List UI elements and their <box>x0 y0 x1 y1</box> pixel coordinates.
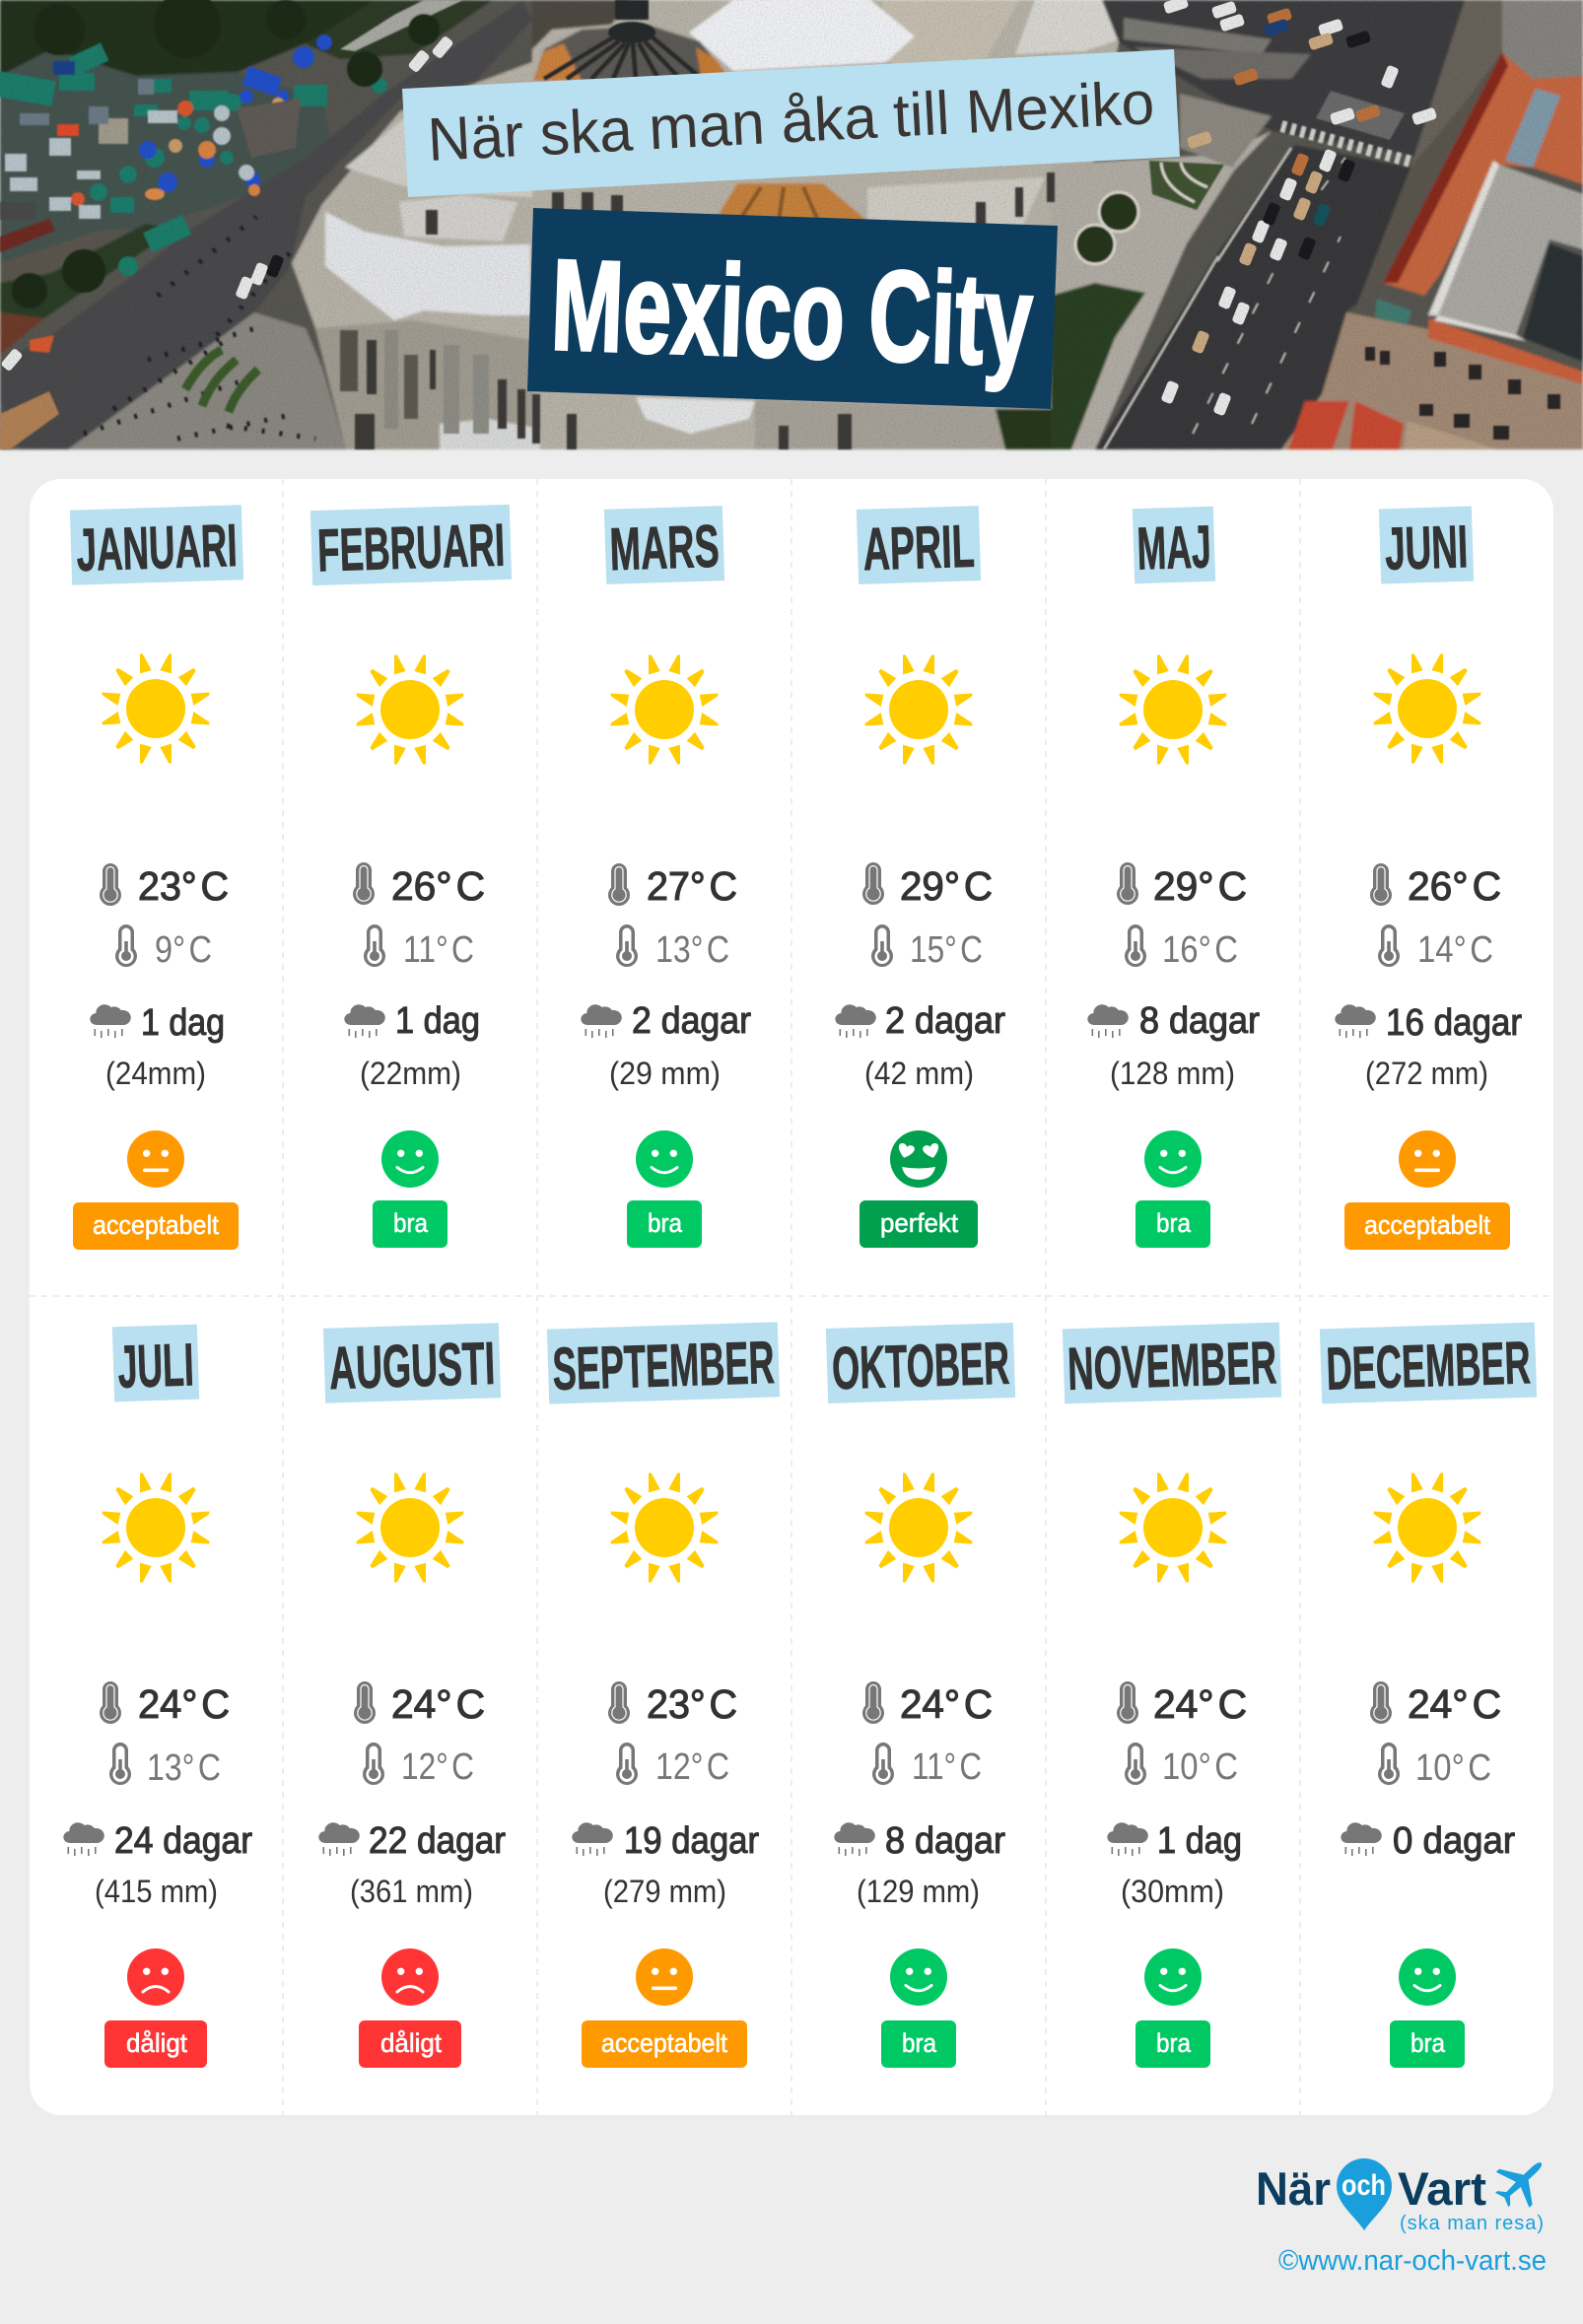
icon: sun <box>357 1472 463 1583</box>
icon: neutral face <box>127 1130 184 1188</box>
month heading: NOVEMBER <box>1067 1329 1277 1402</box>
banner: subtitle <box>402 49 1180 197</box>
high temperature: 29°C <box>1153 863 1247 909</box>
month heading: APRIL <box>862 513 976 582</box>
rating badge <box>104 2020 207 2068</box>
rain days: 1 dag <box>141 1002 225 1044</box>
icon: sun <box>611 1472 718 1583</box>
rating badge: dåligt <box>126 2028 187 2058</box>
rating badge: bra <box>902 2028 937 2058</box>
panel: januari <box>70 505 243 1250</box>
logo: När och Vart: (ska man resa) <box>1400 2213 1544 2234</box>
month heading <box>310 505 512 585</box>
icon: sun <box>611 654 718 765</box>
icon: sun <box>103 1472 209 1583</box>
low temperature: 12°C <box>401 1746 474 1788</box>
rainfall: (129 mm) <box>857 1874 980 1909</box>
month heading: MAJ <box>1136 513 1212 582</box>
icon: sun <box>1120 654 1226 765</box>
low temperature: 11°C <box>912 1746 982 1788</box>
building columns and windows <box>340 172 1055 449</box>
high temperature <box>100 863 229 909</box>
rainfall: (415 mm) <box>95 1874 218 1909</box>
stepped planting <box>185 350 258 412</box>
month heading <box>1379 507 1474 583</box>
high temperature: 26°C <box>1408 863 1501 909</box>
rain days <box>834 1820 1005 1862</box>
rating badge: dåligt <box>380 2028 442 2058</box>
high temperature <box>353 862 485 909</box>
rating badge: acceptabelt <box>93 1210 219 1240</box>
high temperature <box>862 862 993 909</box>
crosswalk <box>1281 126 1414 163</box>
rain days <box>1341 1820 1515 1862</box>
low temperature <box>616 1743 729 1788</box>
panel: maj <box>1087 507 1260 1248</box>
month heading <box>1063 1323 1281 1403</box>
icon: sun <box>865 1472 972 1583</box>
month heading: OKTOBER <box>831 1330 1010 1401</box>
icon: neutral face <box>1399 1130 1456 1188</box>
rainfall: (42 mm) <box>864 1056 974 1091</box>
rating badge <box>582 2020 747 2068</box>
low temperature <box>872 1743 982 1788</box>
rainfall: (361 mm) <box>350 1874 473 1909</box>
photo grain <box>0 0 1583 449</box>
icon: happy face <box>1144 1948 1202 2006</box>
high temperature: 24°C <box>900 1681 993 1727</box>
month heading: MARS <box>609 513 721 582</box>
month heading: JULI <box>117 1331 195 1401</box>
low temperature <box>109 1743 221 1789</box>
icon: sad face <box>381 1948 439 2006</box>
rainfall: (29 mm) <box>609 1056 721 1091</box>
icon: happy face <box>890 1948 947 2006</box>
rain days: 8 dagar <box>885 1820 1005 1862</box>
high temperature: 24°C <box>391 1681 485 1727</box>
panel: juli <box>63 1325 252 2068</box>
banner: title <box>527 208 1058 409</box>
icon: map pin <box>1337 2158 1392 2230</box>
low temperature: 16°C <box>1162 929 1238 971</box>
high temperature: 24°C <box>1408 1681 1501 1727</box>
low temperature <box>1378 924 1493 971</box>
rain days: 22 dagar <box>369 1820 506 1862</box>
rating badge: bra <box>1411 2028 1446 2058</box>
high temperature: 24°C <box>138 1681 230 1727</box>
low temperature <box>616 924 729 971</box>
high temperature: 24°C <box>1153 1681 1247 1727</box>
low temperature: 14°C <box>1417 929 1493 971</box>
rating badge: bra <box>1156 1208 1192 1238</box>
panel: augusti <box>318 1323 506 2068</box>
rain days: 1 dag <box>395 1000 480 1042</box>
rating badge <box>359 2020 461 2068</box>
rating badge <box>627 1200 702 1248</box>
icon: neutral face <box>636 1948 693 2006</box>
rating badge <box>73 1202 239 1250</box>
high temperature <box>608 1681 737 1727</box>
tents <box>0 42 387 276</box>
rainfall: (30mm) <box>1121 1874 1224 1909</box>
month heading <box>112 1325 199 1401</box>
crowds on left road and plaza <box>84 217 315 439</box>
high temperature <box>608 863 737 909</box>
rain days <box>1335 1002 1522 1044</box>
month heading <box>547 1322 780 1404</box>
logo: När och Vart <box>1256 2146 1557 2234</box>
low temperature: 11°C <box>403 929 474 971</box>
rain days <box>1087 1000 1260 1042</box>
high temperature: 27°C <box>647 863 737 909</box>
icon: sun <box>103 654 209 763</box>
low temperature: 13°C <box>655 929 729 971</box>
low temperature: 10°C <box>1162 1746 1238 1788</box>
main white card <box>30 479 1553 2115</box>
icon: sun <box>1374 654 1480 763</box>
rating badge <box>373 1200 447 1248</box>
rain days: 19 dagar <box>624 1820 759 1862</box>
panel: september <box>547 1322 780 2068</box>
header photo: aerial view of Palacio de Bellas Artes <box>0 0 1583 449</box>
icon: sun <box>1120 1472 1226 1583</box>
icon: happy face <box>1399 1948 1456 2006</box>
rain days: 0 dagar <box>1393 1820 1515 1862</box>
icon: heart-eyes face <box>890 1130 947 1188</box>
logo: När och Vart: Vart <box>1398 2162 1486 2215</box>
low temperature: 15°C <box>910 929 983 971</box>
month heading <box>1133 507 1215 583</box>
rain days: 2 dagar <box>632 1000 751 1042</box>
rating badge <box>1344 1202 1510 1250</box>
rain days <box>835 1000 1005 1042</box>
rain days: 8 dagar <box>1139 1000 1260 1042</box>
low temperature <box>363 1743 474 1788</box>
month heading <box>70 505 243 585</box>
rain days <box>1107 1820 1242 1862</box>
month heading: JANUARI <box>76 512 239 583</box>
icon: sad face <box>127 1948 184 2006</box>
rainfall: (272 mm) <box>1365 1056 1488 1091</box>
panel: mars <box>581 506 751 1248</box>
low temperature: 13°C <box>147 1747 221 1789</box>
month heading <box>857 506 981 584</box>
high temperature: 23°C <box>647 1681 737 1727</box>
rating badge <box>860 1200 978 1248</box>
rating badge: perfekt <box>880 1208 958 1238</box>
website credit: ©www.nar-och-vart.se <box>1278 2245 1547 2277</box>
brick windows <box>1365 347 1560 440</box>
rating badge <box>1136 1200 1210 1248</box>
rain days: 24 dagar <box>114 1820 252 1862</box>
rating badge: bra <box>393 1208 429 1238</box>
panel: februari <box>310 505 512 1248</box>
rating badge: acceptabelt <box>601 2028 727 2058</box>
panel: oktober <box>826 1323 1015 2068</box>
low temperature: 12°C <box>655 1746 729 1788</box>
icon: happy face <box>1144 1130 1202 1188</box>
icon: sun <box>357 654 463 765</box>
banner: subtitle: När ska man åka till Mexiko <box>426 69 1156 174</box>
month heading: FEBRUARI <box>316 512 506 583</box>
rainfall: (279 mm) <box>603 1874 726 1909</box>
low temperature <box>1125 924 1238 971</box>
rain days: 1 dag <box>1157 1820 1242 1862</box>
panel: december <box>1320 1323 1537 2068</box>
icon: sun <box>1374 1472 1480 1583</box>
rain days <box>344 1000 480 1042</box>
rating badge <box>881 2020 956 2068</box>
rain days <box>572 1820 759 1862</box>
rainfall: (22mm) <box>360 1056 461 1091</box>
logo: När och Vart: och <box>1342 2169 1386 2202</box>
rain days <box>63 1820 252 1862</box>
rain days <box>318 1820 506 1862</box>
rain days <box>90 1002 225 1044</box>
logo: När och Vart: När <box>1256 2162 1331 2215</box>
rain days <box>581 1000 751 1042</box>
icon: happy face <box>636 1130 693 1188</box>
rain days: 16 dagar <box>1386 1002 1522 1044</box>
low temperature <box>115 924 212 971</box>
high temperature: 26°C <box>391 863 485 909</box>
low temperature <box>871 924 983 971</box>
high temperature: 23°C <box>138 863 229 909</box>
right-side planters <box>1075 192 1138 264</box>
spire and dome ribs <box>615 0 649 20</box>
tree clumps <box>12 0 440 308</box>
low temperature <box>364 924 474 971</box>
month heading <box>826 1323 1015 1403</box>
rain days: 2 dagar <box>885 1000 1005 1042</box>
rainfall: (24mm) <box>105 1056 206 1091</box>
road lane markings <box>1104 148 1291 449</box>
month heading <box>323 1323 501 1403</box>
cars <box>0 0 1437 416</box>
month heading <box>604 506 724 584</box>
rating badge: bra <box>648 1208 683 1238</box>
rating badge: bra <box>1156 2028 1192 2058</box>
low temperature: 10°C <box>1415 1747 1491 1789</box>
rating badge <box>1390 2020 1465 2068</box>
icon: airplane <box>1485 2146 1557 2218</box>
month heading: JUNI <box>1384 513 1469 582</box>
rainfall: (128 mm) <box>1110 1056 1235 1091</box>
rating badge <box>1136 2020 1210 2068</box>
low temperature: 9°C <box>155 929 212 971</box>
month heading: SEPTEMBER <box>552 1329 776 1402</box>
month heading: AUGUSTI <box>328 1330 496 1401</box>
high temperature: 29°C <box>900 863 993 909</box>
panel: april <box>835 506 1005 1248</box>
panel: juni <box>1335 507 1522 1250</box>
icon: happy face <box>381 1130 439 1188</box>
rating badge: acceptabelt <box>1364 1210 1490 1240</box>
low temperature <box>1378 1743 1491 1789</box>
banner: title: Mexico City <box>549 232 1035 393</box>
panel: november <box>1063 1323 1281 2068</box>
icon: sun <box>865 654 972 765</box>
low temperature <box>1125 1743 1238 1788</box>
